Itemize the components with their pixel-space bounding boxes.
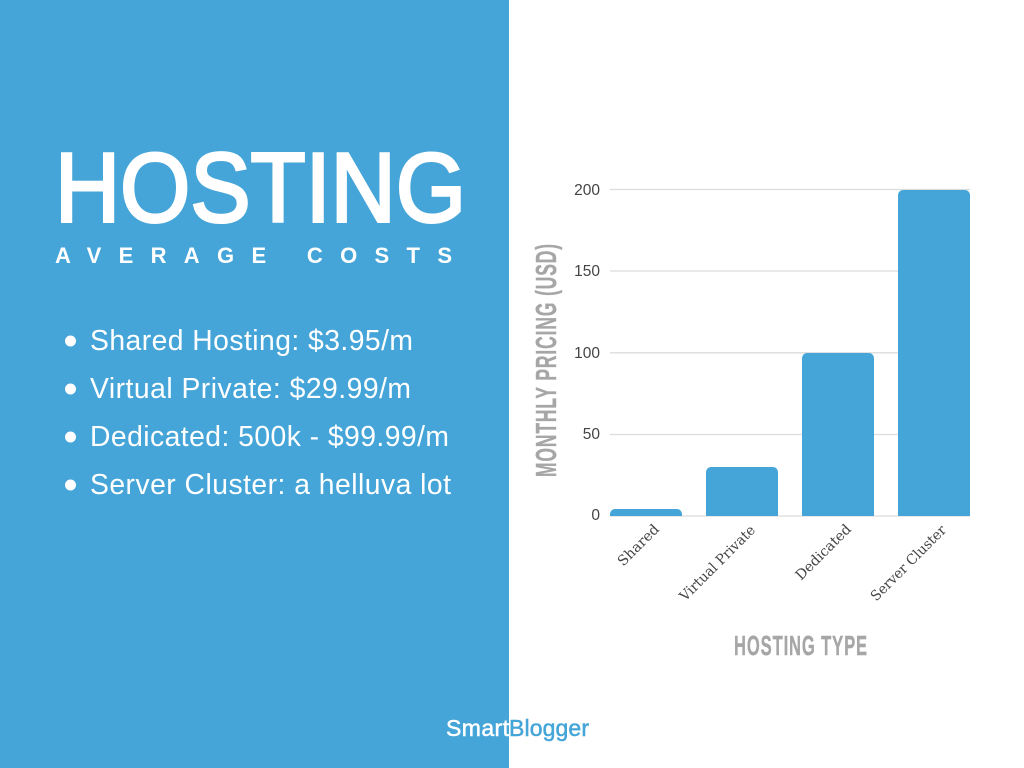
list: hosting costs [65,324,451,500]
y axis tick labels: 50 [583,426,600,443]
y axis title: MONTHLY PRICING (USD) [531,243,563,477]
x axis category labels: Server Cluster [868,522,950,605]
y axis tick labels: 150 [574,263,600,280]
x axis title: HOSTING TYPE [734,630,868,661]
logo: SmartBlogger: Smart [446,715,510,741]
x axis category labels [615,521,950,605]
x axis category labels: Dedicated [793,521,855,584]
y axis tick labels: 100 [574,345,600,362]
x axis category labels: Virtual Private [676,523,759,605]
subtitle: AVERAGE COSTS [55,243,452,268]
bars [610,190,970,516]
list item: shared hosting: Shared Hosting: $3.95/m [90,324,413,356]
bar chart [531,182,970,661]
title: HOSTING [55,132,466,242]
list item: virtual private: Virtual Private: $29.99/m [90,372,411,404]
y axis tick labels [574,182,600,524]
list item: dedicated: Dedicated: 500k - $99.99/m [90,420,449,452]
logo: SmartBlogger: Blogger [509,715,589,741]
panel: blue left background [0,0,509,768]
y axis tick labels: 0 [591,507,600,524]
x axis category labels: Shared [615,521,663,570]
logo: SmartBlogger [446,715,589,741]
y axis tick labels: 200 [574,182,600,199]
list item: server cluster: Server Cluster: a helluva lot [90,468,451,500]
